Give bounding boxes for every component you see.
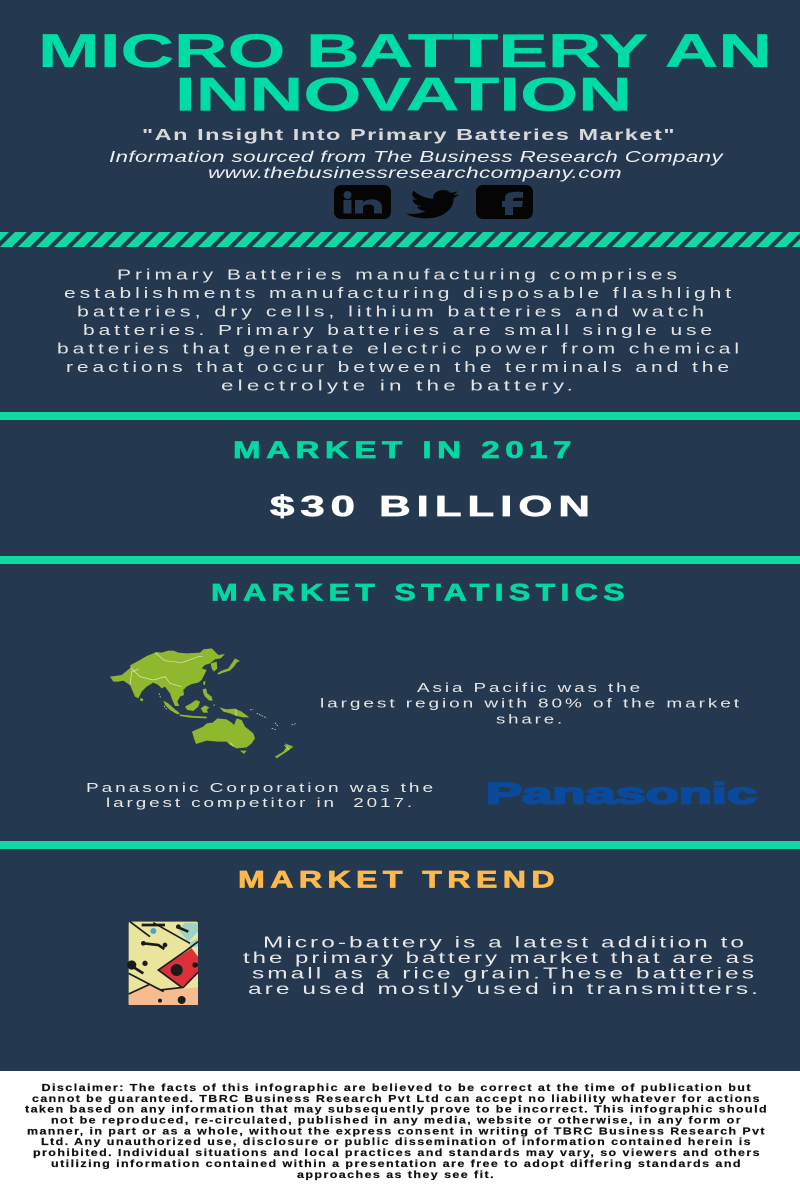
- disclaimer text: [25, 1082, 768, 1181]
- icon: micro battery: [127, 922, 198, 1005]
- source information: [109, 149, 724, 182]
- heading: market statistics: MARKET STATISTICS: [211, 580, 630, 606]
- intro paragraph: batteries that generate electric power from chemical: [57, 340, 743, 358]
- source information: Information sourced from The Business Research Company: [109, 149, 724, 166]
- icon: linkedin: [334, 185, 391, 219]
- intro paragraph: batteries. Primary batteries are small single use: [83, 322, 716, 339]
- intro paragraph: establishments manufacturing disposable flashlight: [64, 285, 735, 302]
- text: market trend: small as a rice grain.These batteries: [252, 966, 757, 982]
- map: asia pacific: [110, 648, 296, 758]
- intro paragraph: batteries, dry cells, lithium batteries and watch: [77, 304, 708, 320]
- text: asia pacific share: [320, 680, 742, 726]
- source information: www.thebusinessresearchcompany.com: [208, 165, 622, 182]
- text: market trend: are used mostly used in transmitters.: [248, 981, 761, 998]
- title: MICRO BATTERY AN: [38, 24, 772, 77]
- text: asia pacific share: share.: [496, 712, 565, 726]
- subtitle: "An Insight Into Primary Batteries Market": [142, 127, 676, 144]
- striped divider: [0, 232, 800, 247]
- disclaimer text: taken based on any information that may subsequently prove to be incorrect. This infographic should: [25, 1104, 768, 1116]
- disclaimer text: prohibited. Individual situations and local practices and standards may vary, so viewers and others: [33, 1147, 761, 1159]
- text: panasonic competitor: Panasonic Corporation was the: [86, 780, 436, 795]
- intro paragraph: reactions that occur between the terminals and the: [66, 359, 733, 376]
- title: INNOVATION: [175, 68, 632, 120]
- heading: market in 2017: MARKET IN 2017: [233, 437, 577, 464]
- panasonic logo: Panasonic: [486, 778, 757, 810]
- disclaimer text: approaches as they see fit.: [297, 1169, 495, 1181]
- disclaimer text: not be reproduced, re-circulated, published in any media, website or otherwise, in any form or: [51, 1114, 742, 1126]
- intro paragraph: electrolyte in the battery.: [221, 378, 577, 394]
- text: market trend: Micro-battery is a latest addition to: [263, 934, 747, 952]
- disclaimer panel: [0, 1071, 800, 1200]
- text: asia pacific share: largest region with 80% of the market: [320, 696, 742, 710]
- text: panasonic competitor: [86, 780, 436, 810]
- disclaimer text: Disclaimer: The facts of this infographic are believed to be correct at the time of publication but: [42, 1082, 752, 1094]
- market value: $30 BILLION: [270, 491, 596, 523]
- text: panasonic competitor: largest competitor in 2017.: [106, 795, 415, 810]
- disclaimer text: cannot be guaranteed. TBRC Business Research Pvt Ltd can accept no liability whatever for actions: [32, 1093, 761, 1105]
- title: [38, 24, 772, 120]
- disclaimer text: manner, in part or as a whole, without the express consent in writing of TBRC Business Research Pvt: [27, 1125, 766, 1137]
- disclaimer text: Ltd. Any unauthorized use, disclosure or public dissemination of information contained herein is: [41, 1136, 752, 1148]
- social icons: [334, 185, 533, 219]
- heading: market trend: MARKET TREND: [238, 866, 560, 894]
- text: asia pacific share: Asia Pacific was the: [417, 680, 643, 695]
- text: market trend: [243, 934, 761, 998]
- intro paragraph: [57, 266, 743, 394]
- intro paragraph: Primary Batteries manufacturing comprises: [117, 266, 681, 284]
- icon: facebook: [476, 185, 533, 219]
- text: market trend: the primary battery market that are as: [243, 950, 757, 967]
- icon: twitter: [406, 190, 459, 218]
- disclaimer text: utilizing information contained within a presentation are free to adopt differing standards and: [51, 1158, 742, 1170]
